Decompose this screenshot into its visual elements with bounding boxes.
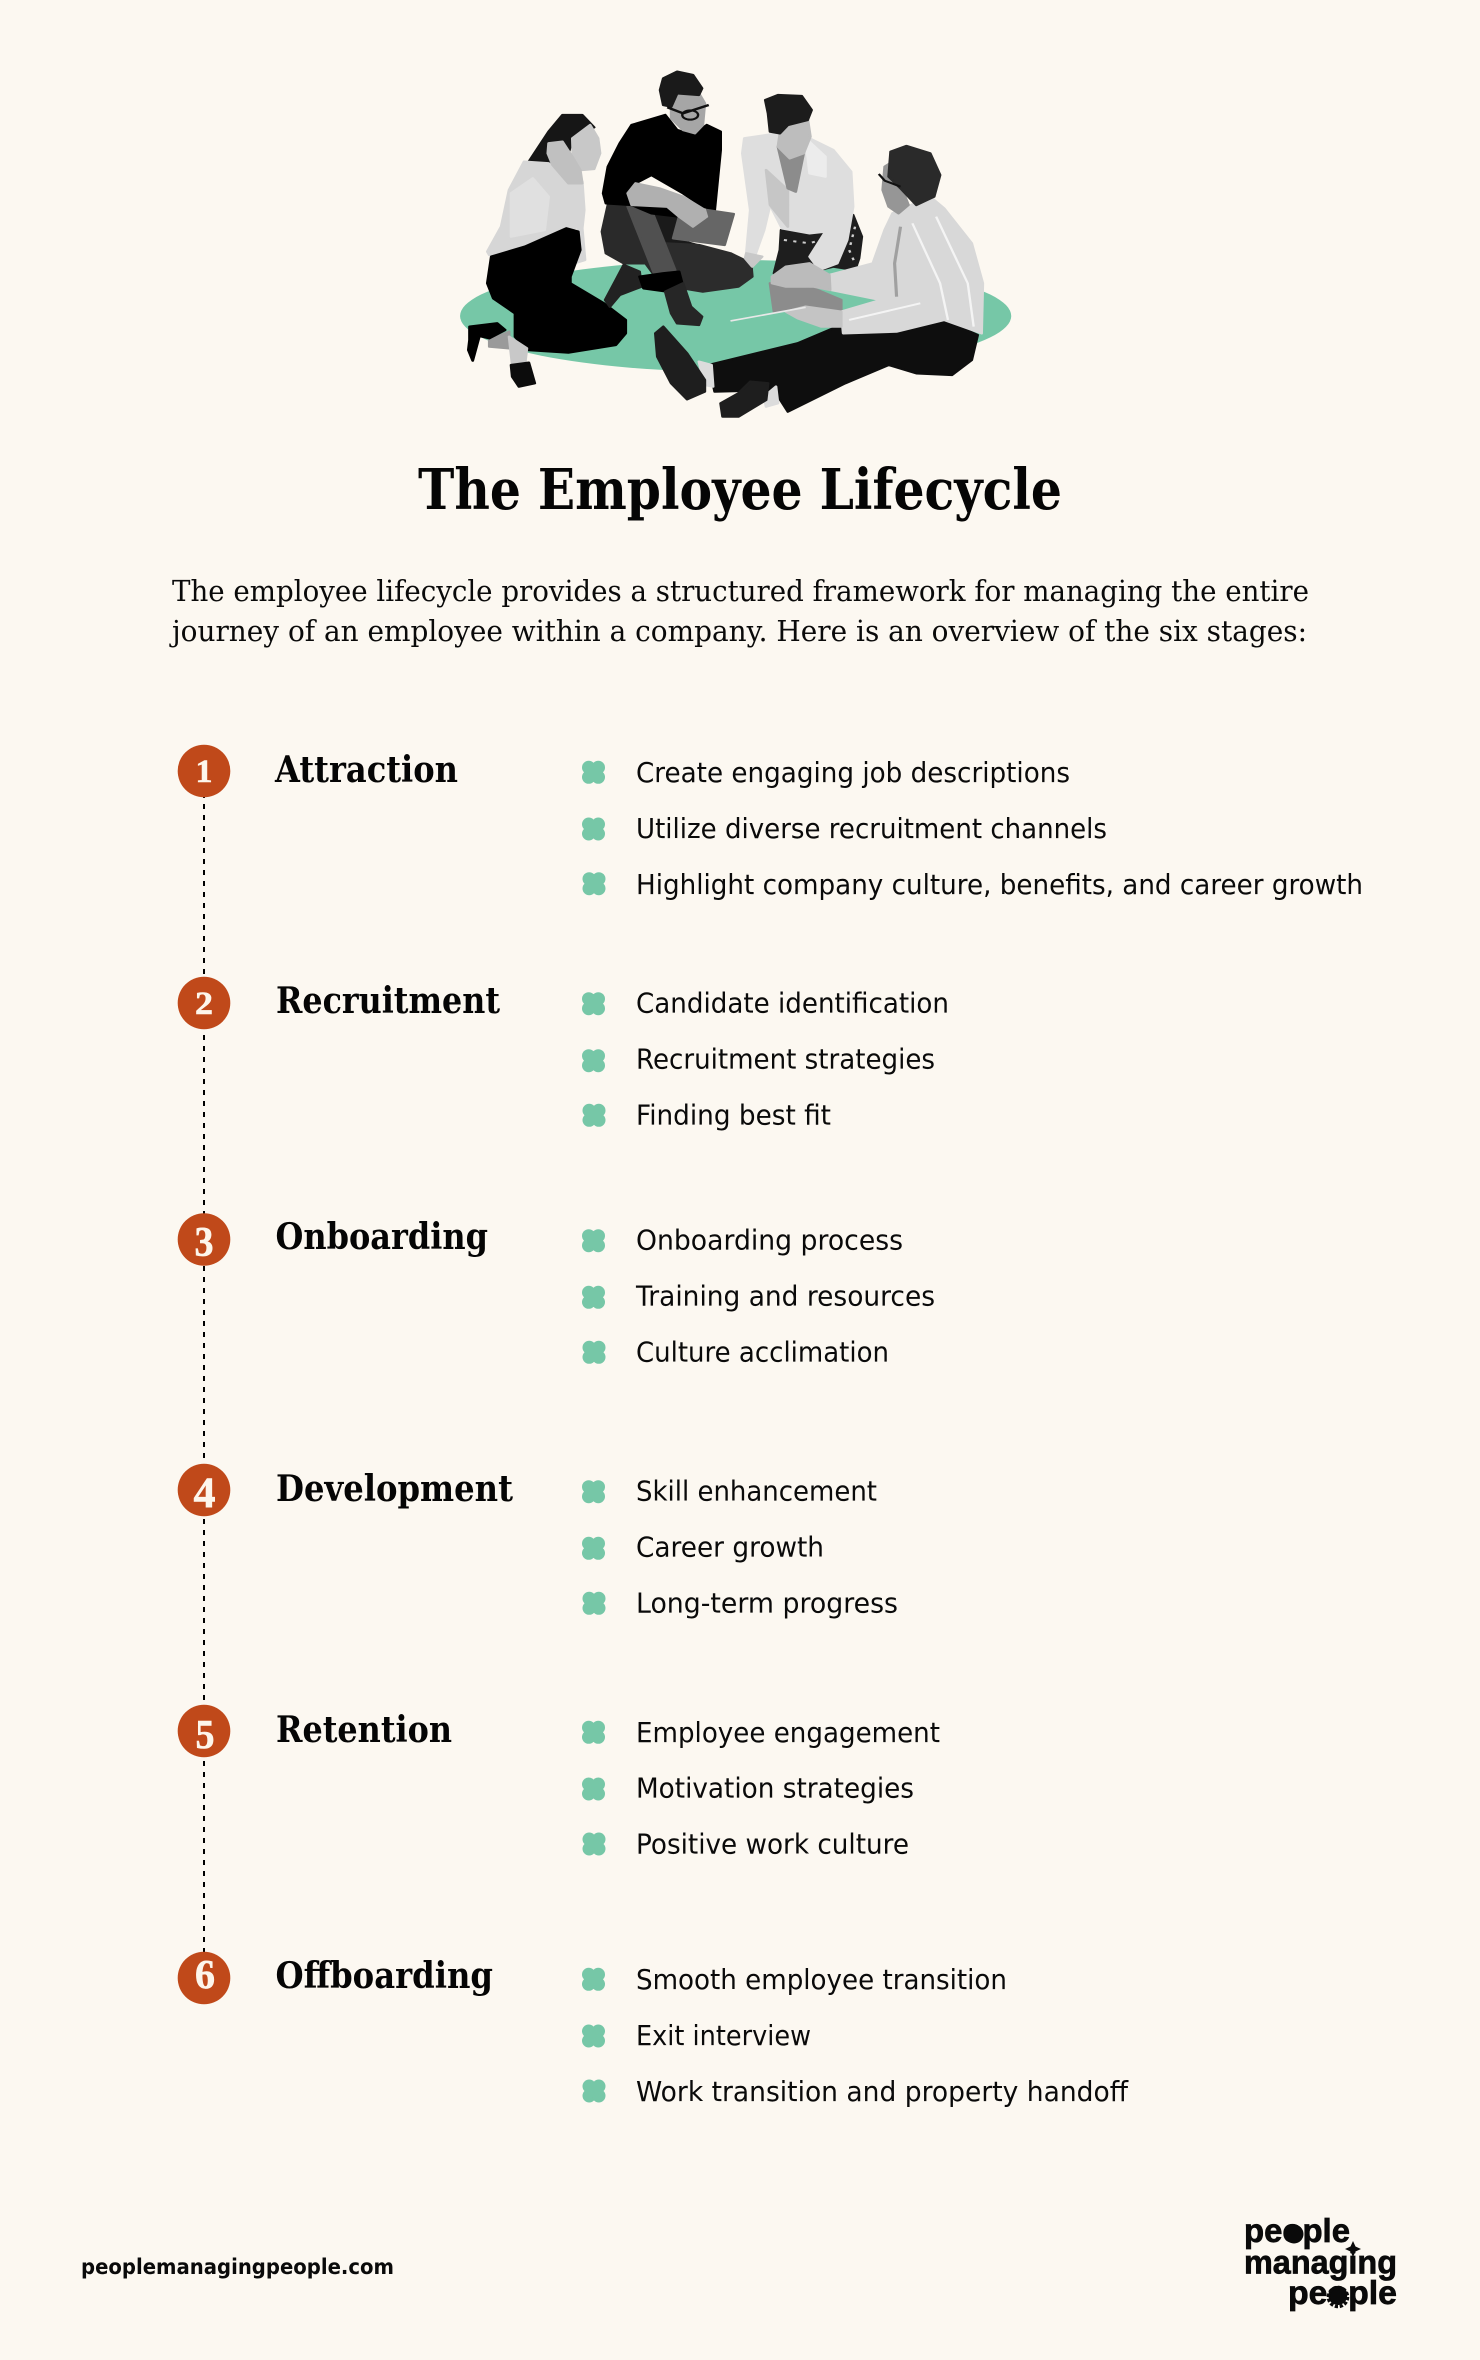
timeline dotted line	[203, 771, 205, 1978]
bullet list: Onboarding process	[636, 1223, 903, 1256]
number badge 4	[178, 1464, 230, 1517]
number badge 2: 2	[195, 986, 213, 1022]
bullet list: Exit interview	[636, 2019, 811, 2052]
bullet list: Utilize diverse recruitment channels	[636, 812, 1107, 845]
bullet list: Skill enhancement	[636, 1475, 877, 1508]
footer website: peoplemanagingpeople.com	[81, 2255, 394, 2279]
number badge 6	[178, 1951, 230, 2004]
number badge 5: 5	[196, 1711, 214, 1757]
number badge 6: 6	[195, 1951, 215, 1997]
bullet list: Training and resources	[635, 1279, 935, 1312]
intro text	[169, 574, 1309, 648]
illustration: four colleagues seated on a green ellipse	[460, 72, 1011, 417]
heading: Development	[276, 1468, 513, 1510]
heading: Onboarding	[276, 1216, 488, 1258]
stage 5: Retention	[178, 1705, 940, 1860]
title: The Employee Lifecycle	[418, 457, 1062, 523]
bullet list: Positive work culture	[636, 1828, 909, 1860]
bullet list: Work transition and property handoff	[636, 2075, 1129, 2108]
heading: Offboarding	[276, 1955, 493, 1997]
stage 4: Development	[178, 1464, 898, 1620]
number badge 1	[178, 745, 230, 797]
number badge 5	[178, 1705, 230, 1757]
intro text: journey of an employee within a company. Here is an overview of the six stages:	[169, 614, 1307, 648]
green ellipse	[460, 260, 1011, 372]
number badge 4: 4	[194, 1470, 216, 1517]
bullet list: Create engaging job descriptions	[636, 756, 1070, 789]
logo: people managing people	[1244, 2212, 1397, 2311]
logo: people managing people: people	[1288, 2274, 1397, 2311]
bullet list: Finding best fit	[636, 1099, 831, 1132]
bullet list	[582, 756, 1363, 901]
bullet list: Culture acclimation	[636, 1335, 889, 1368]
heading: Recruitment	[276, 980, 500, 1022]
stage 3: Onboarding	[178, 1213, 935, 1368]
number badge 3: 3	[194, 1220, 214, 1266]
bullet list: Long-term progress	[636, 1587, 898, 1620]
stage 1: Attraction	[178, 745, 1363, 901]
bullet list: Motivation strategies	[636, 1772, 914, 1805]
bullet list	[582, 987, 949, 1132]
person: woman seated left	[468, 115, 626, 387]
logo: people managing people: managing	[1244, 2244, 1397, 2280]
stage 2: Recruitment	[178, 977, 949, 1132]
heading: Attraction	[274, 749, 458, 791]
bullet list: Candidate identification	[636, 987, 949, 1020]
bullet list: Recruitment strategies	[636, 1043, 935, 1076]
bullet list	[582, 1963, 1129, 2108]
person: woman in white shirt	[742, 95, 862, 273]
heading: Retention	[276, 1709, 452, 1751]
number badge 3	[178, 1213, 230, 1266]
stage 6: Offboarding	[178, 1951, 1129, 2108]
number badge 2	[178, 977, 230, 1029]
person: man with glasses	[602, 72, 752, 325]
number badge 1: 1	[196, 754, 212, 790]
bullet list	[582, 1716, 940, 1860]
logo: people managing people: people	[1244, 2212, 1350, 2249]
bullet list	[582, 1475, 898, 1620]
bullet list: Smooth employee transition	[636, 1963, 1007, 1996]
bullet list: Employee engagement	[636, 1716, 940, 1749]
intro text: The employee lifecycle provides a structured framework for managing the entire	[172, 574, 1309, 608]
bullet list	[582, 1223, 935, 1368]
bullet list: Career growth	[636, 1531, 824, 1564]
person: man in striped shirt	[655, 146, 983, 417]
bullet list: Highlight company culture, benefits, and career growth	[636, 868, 1363, 901]
